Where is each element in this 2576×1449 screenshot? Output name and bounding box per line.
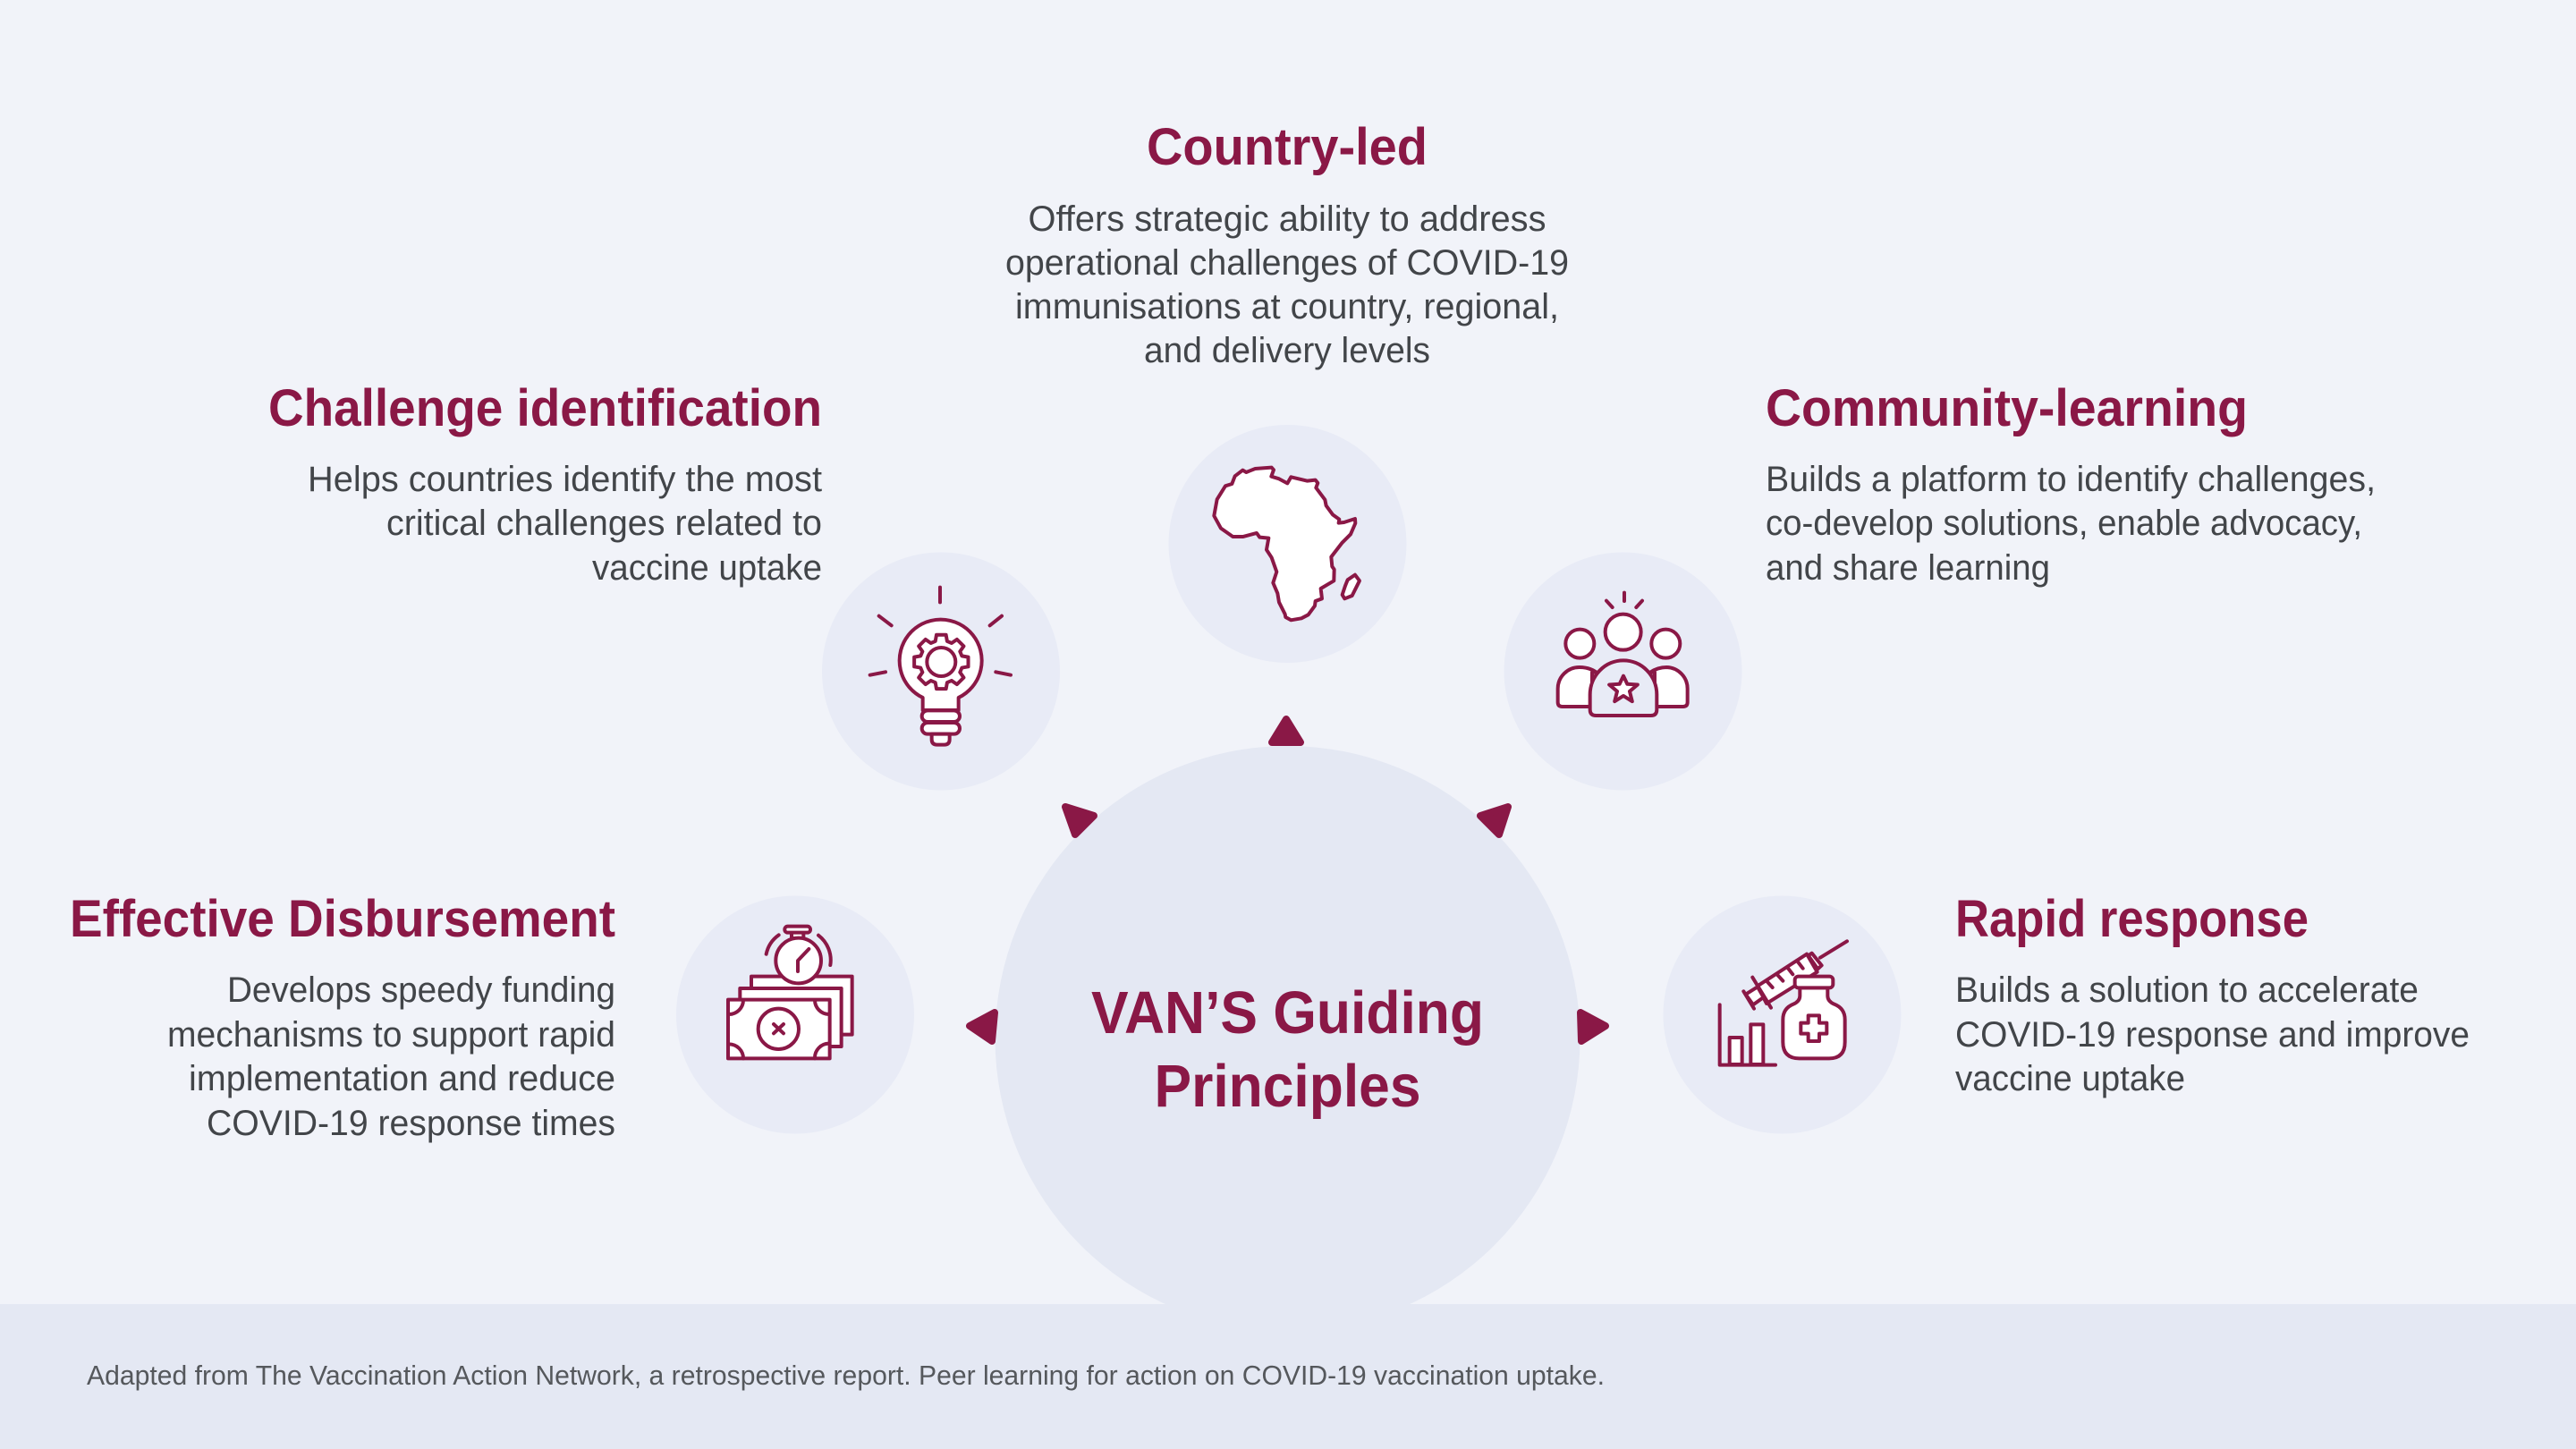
- central circle: VAN'S Guiding Principles: VAN’S Guiding: [1091, 979, 1484, 1046]
- text: Community-learning description: [1766, 460, 2376, 588]
- text: Rapid response description: vaccine uptake: [1955, 1059, 2185, 1098]
- central circle: VAN'S Guiding Principles: [995, 746, 1580, 1331]
- text: Country-led description: operational challenges of COVID-19: [1005, 243, 1569, 283]
- text: Challenge identification description: [308, 460, 822, 588]
- text: Effective Disbursement description: Develops speedy funding: [227, 970, 615, 1010]
- text: Effective Disbursement description: mechanisms to support rapid: [167, 1015, 615, 1055]
- text: Country-led description: [1005, 199, 1569, 370]
- text: Effective Disbursement description: [167, 970, 615, 1143]
- heading: Country-led: Country-led: [1147, 118, 1428, 176]
- heading: Effective Disbursement: Effective Disbursement: [70, 890, 615, 948]
- text: Community-learning description: and share learning: [1766, 548, 2050, 588]
- text: Country-led description: Offers strategic ability to address: [1029, 199, 1546, 239]
- icon: banknotes and stopwatch: [676, 896, 914, 1134]
- icon: Africa map: [1168, 425, 1406, 663]
- icon: community group with star: [1504, 553, 1742, 791]
- footer source note: Adapted from The Vaccination Action Network, a retrospective report. Peer learning for action on COVID-19 vaccination uptake.: [87, 1360, 1605, 1391]
- text: Community-learning description: Builds a platform to identify challenges,: [1766, 460, 2376, 499]
- panel: Country-led: [1005, 118, 1569, 663]
- central circle: VAN'S Guiding Principles: Principles: [1154, 1053, 1420, 1120]
- panel: Challenge identification: [268, 379, 1060, 791]
- text: Effective Disbursement description: implementation and reduce: [189, 1059, 615, 1098]
- text: Challenge identification description: critical challenges related to: [386, 504, 822, 543]
- text: Challenge identification description: Helps countries identify the most: [308, 460, 822, 499]
- panel: Rapid response: [1664, 890, 2470, 1134]
- text: Effective Disbursement description: COVID-19 response times: [207, 1104, 615, 1143]
- heading: Rapid response: Rapid response: [1955, 890, 2309, 948]
- text: Country-led description: and delivery levels: [1144, 331, 1430, 370]
- text: Community-learning description: co-develop solutions, enable advocacy,: [1766, 504, 2362, 543]
- text: Country-led description: immunisations at country, regional,: [1015, 287, 1559, 326]
- icon: lightbulb with gear: [822, 553, 1060, 791]
- text: Rapid response description: COVID-19 response and improve: [1955, 1015, 2470, 1055]
- arrows pointing outward from the central circle: [970, 719, 1606, 1041]
- icon: syringe, vaccine vial and bar chart: [1664, 896, 1902, 1134]
- text: Challenge identification description: vaccine uptake: [592, 548, 822, 588]
- heading: Challenge identification: Challenge identification: [268, 379, 822, 437]
- panel: Effective Disbursement: [70, 890, 914, 1143]
- footer band: [0, 1304, 2576, 1449]
- text: Rapid response description: Builds a solution to accelerate: [1955, 970, 2419, 1010]
- heading: Community-learning: Community-learning: [1766, 379, 2248, 437]
- text: Rapid response description: [1955, 970, 2470, 1098]
- panel: Community-learning: [1504, 379, 2376, 791]
